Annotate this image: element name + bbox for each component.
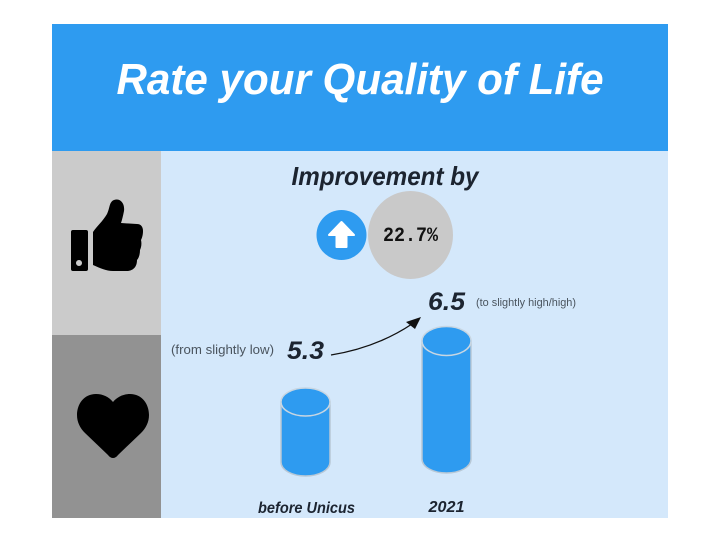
- percentage value: 22.7%: [383, 225, 439, 248]
- label: 2021: 2021: [427, 499, 464, 516]
- title: Rate your Quality of Life: [116, 55, 604, 104]
- value: 6.5: 6.5: [428, 288, 466, 316]
- cylinder: 2021: [422, 326, 471, 473]
- panel: content background: [161, 151, 668, 518]
- icon: up arrow circle: [316, 210, 366, 260]
- note: from slightly low: (from slightly low): [171, 342, 274, 357]
- value: 5.3: 5.3: [287, 337, 324, 365]
- heading: improvement by: Improvement by: [292, 161, 480, 191]
- panel: heart sidebar: [52, 335, 161, 518]
- panel: thumbs up sidebar: [52, 151, 161, 335]
- label: before Unicus: before Unicus: [258, 500, 355, 517]
- note: to slightly high/high: (to slightly high/high): [476, 297, 576, 309]
- icon: heart: [77, 394, 149, 458]
- percentage circle: [368, 191, 453, 279]
- cylinder: before Unicus: [281, 388, 330, 476]
- arrow: from 5.3 to 6.5: [331, 317, 421, 355]
- icon: thumbs up: [71, 200, 143, 271]
- panel: title banner: [52, 24, 668, 151]
